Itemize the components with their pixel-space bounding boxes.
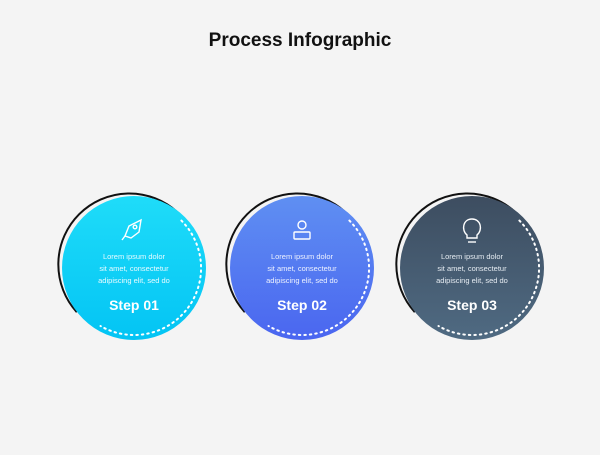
title: Process Infographic: [209, 30, 392, 51]
step 1: [58, 193, 206, 340]
step 3: [396, 193, 544, 340]
step 2: sit amet, consectetur: [267, 264, 337, 273]
icon: rocket: [122, 220, 141, 240]
step 2: Step 02: [277, 297, 327, 313]
icon: bulb: [464, 219, 480, 242]
step 1: adipiscing elit, sed do: [98, 276, 170, 285]
step 3: Step 03: [447, 297, 497, 313]
step 1: sit amet, consectetur: [99, 264, 169, 273]
step 3: sit amet, consectetur: [437, 264, 507, 273]
step 3: Lorem ipsum dolor: [441, 252, 504, 261]
step 3: adipiscing elit, sed do: [436, 276, 508, 285]
step 1: Lorem ipsum dolor: [103, 252, 166, 261]
step 1: Step 01: [109, 297, 159, 313]
step 2: Lorem ipsum dolor: [271, 252, 334, 261]
step 2: adipiscing elit, sed do: [266, 276, 338, 285]
step 2: [226, 193, 374, 340]
icon: user: [294, 221, 310, 239]
